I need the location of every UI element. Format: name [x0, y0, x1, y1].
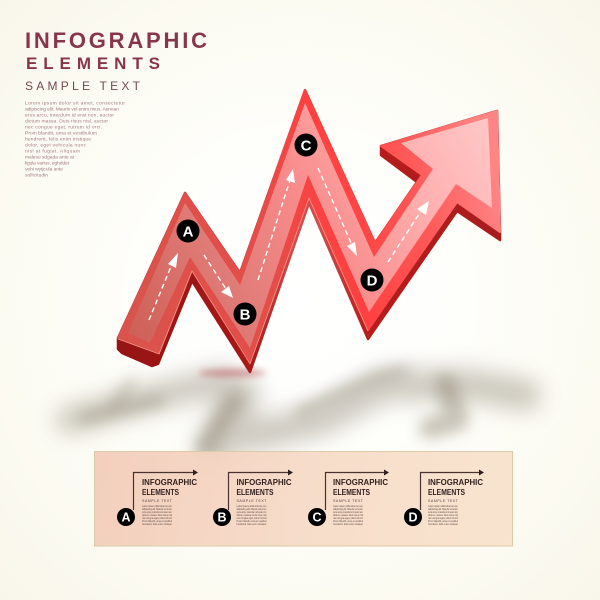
- legend item A: Lorem ipsum dolor sit amet, con: [142, 504, 173, 508]
- legend item D: nec congue eget, rutrum id orci: [428, 516, 458, 520]
- text block: lorem: hendrerit, felis enim tristique: [25, 136, 91, 142]
- legend item A: ELEMENTS: [142, 487, 179, 497]
- subtitle: sample text: SAMPLE TEXT: [25, 79, 141, 93]
- legend item B: Lorem ipsum dolor sit amet, con: [236, 504, 267, 508]
- zigzag arrow chart: [118, 90, 500, 372]
- legend item C: nec congue eget, rutrum id orci: [333, 516, 363, 520]
- legend item C: eros arcu, interdum id erat non: [333, 510, 364, 514]
- legend item A: Proin blandit, urna et vestibul: [142, 519, 172, 523]
- legend panel: [94, 452, 512, 546]
- text block: lorem: dictum massa. Duis risus nisl, auctor: [25, 118, 108, 124]
- heading: elements: ELEMENTS: [26, 54, 160, 73]
- legend item B: [213, 470, 293, 526]
- legend item A: A: [121, 510, 131, 524]
- dashed arrow 2: [204, 255, 233, 298]
- legend item D: Lorem ipsum dolor sit amet, con: [428, 504, 459, 508]
- text block: lorem: malesu sdgada ante at: [25, 154, 75, 160]
- marker D: [360, 268, 384, 292]
- chart shadow: [70, 369, 525, 450]
- marker B: [234, 302, 256, 326]
- legend item D: adipiscing elit. Mauris vel enim: [428, 507, 458, 511]
- heading: infographic: INFOGRAPHIC: [25, 28, 207, 53]
- legend item A: eros arcu, interdum id erat non: [142, 510, 173, 514]
- arrow inner panel: [128, 103, 492, 348]
- legend item C: SAMPLE TEXT: [333, 499, 364, 503]
- legend item A: [117, 470, 198, 526]
- legend item C: [308, 470, 389, 526]
- text block: lorem: adipiscing elit. Mauris vel enim risus. Aenean: [25, 106, 119, 112]
- text block: lorem: [25, 100, 125, 178]
- panel background: [94, 452, 512, 546]
- legend item D: Proin blandit, urna et vestibul: [428, 519, 458, 523]
- legend item B: INFOGRAPHIC: [236, 477, 292, 487]
- marker A: [176, 220, 200, 242]
- dashed arrow 4: [318, 168, 357, 256]
- legend item B: hendrerit, felis enim tristique: [236, 522, 267, 526]
- arrow side extrusion: [118, 90, 500, 372]
- dashed arrow 5: [388, 201, 429, 262]
- legend item C: C: [312, 510, 322, 524]
- legend item D: hendrerit, felis enim tristique: [428, 522, 459, 526]
- legend item B: eros arcu, interdum id erat non: [236, 510, 267, 514]
- marker A: A: [183, 224, 194, 240]
- legend item D: [404, 470, 484, 526]
- legend item A: dictum massa. Duis risus nisl: [142, 513, 172, 517]
- text block: lorem: dolor, eget vehicula nunc: [25, 142, 87, 148]
- text block: lorem: nec congue eget, rutrum id orci.: [25, 124, 102, 130]
- legend item B: Proin blandit, urna et vestibul: [236, 519, 267, 523]
- marker C: C: [301, 138, 312, 154]
- legend item D: INFOGRAPHIC: [428, 477, 483, 487]
- legend item A: SAMPLE TEXT: [142, 499, 173, 503]
- text block: lorem: vehi wytjcula ante: [25, 166, 63, 172]
- legend item C: ELEMENTS: [333, 487, 370, 497]
- legend item D: ELEMENTS: [428, 487, 465, 497]
- legend item A: INFOGRAPHIC: [142, 477, 197, 487]
- text block: lorem: eros arcu, interdum id erat non, auctor: [25, 112, 114, 118]
- marker C: [294, 134, 318, 156]
- text block: lorem: Lorem ipsum dolor sit amet, consectetur: [25, 100, 125, 106]
- text block: lorem: sollicitudin: [25, 172, 48, 178]
- legend item C: Lorem ipsum dolor sit amet, con: [333, 504, 364, 508]
- legend item A: hendrerit, felis enim tristique: [142, 522, 173, 526]
- marker B: B: [240, 306, 251, 324]
- arrow front face: [118, 90, 500, 362]
- legend item C: Proin blandit, urna et vestibul: [333, 519, 363, 523]
- legend item B: ELEMENTS: [236, 487, 274, 497]
- legend item B: B: [217, 510, 227, 524]
- legend item C: dictum massa. Duis risus nisl: [333, 513, 363, 517]
- legend item D: D: [408, 510, 418, 524]
- text block: lorem: ligula varius, eghddet: [25, 160, 70, 166]
- legend item A: nec congue eget, rutrum id orci: [142, 516, 172, 520]
- legend item B: dictum massa. Duis risus nisl: [236, 513, 267, 517]
- legend item C: INFOGRAPHIC: [333, 477, 388, 487]
- legend item A: adipiscing elit. Mauris vel enim: [142, 507, 172, 511]
- marker D: D: [367, 272, 378, 290]
- legend item D: SAMPLE TEXT: [428, 499, 459, 503]
- text block: lorem: Proin blandit, urna et vestibulum: [25, 130, 97, 136]
- legend item B: nec congue eget, rutrum id orci: [236, 516, 267, 520]
- legend item C: hendrerit, felis enim tristique: [333, 522, 364, 526]
- legend item B: SAMPLE TEXT: [236, 499, 267, 503]
- legend item D: eros arcu, interdum id erat non: [428, 510, 459, 514]
- legend item C: adipiscing elit. Mauris vel enim: [333, 507, 363, 511]
- legend item D: dictum massa. Duis risus nisl: [428, 513, 458, 517]
- edge highlight: [118, 198, 368, 364]
- dashed arrow 3: [258, 169, 295, 280]
- dashed arrow 1: [149, 253, 178, 320]
- legend item B: adipiscing elit. Mauris vel enim: [236, 507, 266, 511]
- text block: lorem: nisl at fugiat. Aliquam: [25, 148, 80, 154]
- title: [25, 28, 207, 93]
